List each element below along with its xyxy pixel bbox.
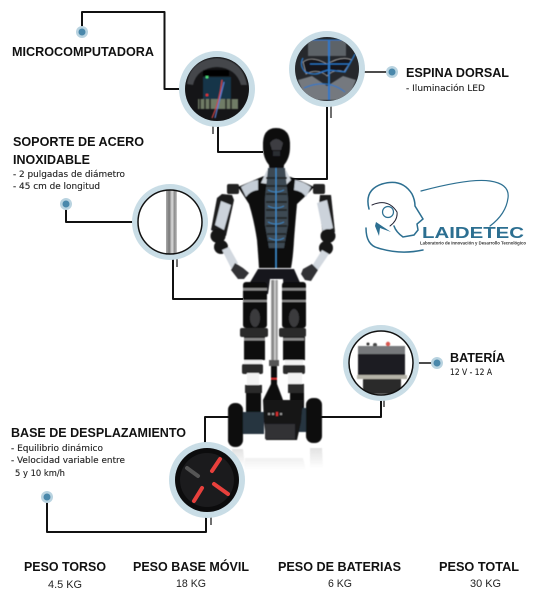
stat: peso total: 30 KG <box>470 578 501 590</box>
text block: soporte de acero: INOXIDABLE <box>13 152 90 167</box>
stat: peso torso: 4.5 KG <box>48 579 82 591</box>
logo mark <box>366 180 508 252</box>
text block: soporte de acero <box>13 134 144 192</box>
dot: soporte <box>60 198 72 210</box>
mobile base <box>228 398 322 447</box>
text block: soporte de acero: SOPORTE DE ACERO <box>13 134 144 149</box>
circle: spine photo <box>289 31 365 107</box>
circle: wheel photo <box>169 442 245 518</box>
stat: peso base movil: 18 KG <box>176 578 206 590</box>
left leg <box>240 282 268 420</box>
left arm <box>210 184 249 279</box>
stat: peso de baterias: PESO DE BATERIAS <box>278 559 401 574</box>
stat: peso base movil: PESO BASE MÓVIL <box>133 559 249 574</box>
stat: peso de baterias <box>278 559 401 590</box>
logo name: LAIDETEC <box>422 225 525 242</box>
head <box>263 128 290 178</box>
right arm <box>301 184 336 281</box>
robot <box>210 128 336 470</box>
stat: peso total: PESO TOTAL <box>439 559 519 574</box>
text block: base de desplazamiento: - Equilibrio dinámico <box>11 444 103 454</box>
circle: microcomputer photo <box>179 51 255 127</box>
heading: espina dorsal: ESPINA DORSAL <box>406 65 509 80</box>
pelvis <box>243 269 305 294</box>
text block: base de desplazamiento <box>11 425 186 479</box>
text: bateria details: 12 V - 12 A <box>450 368 492 378</box>
connector lines <box>47 12 437 532</box>
logo: LAIDETEC <box>366 180 526 252</box>
text: espina dorsal details: - Iluminación LED <box>406 83 485 94</box>
reflection <box>232 448 323 470</box>
text block: soporte de acero: - 45 cm de longitud <box>13 182 100 192</box>
circle: battery photo <box>343 325 419 401</box>
support pole <box>263 280 283 400</box>
dot: microcomputadora <box>76 26 88 38</box>
heading: bateria: BATERÍA <box>450 350 506 365</box>
dot: espina dorsal <box>386 66 398 78</box>
stat: peso total <box>439 559 519 590</box>
logo subtitle: Laboratorio de Innovación y Desarrollo Tecnológico <box>420 240 526 246</box>
circle: steel bar photo <box>132 184 208 260</box>
stat: peso torso: PESO TORSO <box>24 559 106 574</box>
stat: peso torso <box>24 559 106 591</box>
stat: peso de baterias: 6 KG <box>328 578 352 590</box>
dot: base <box>41 491 53 503</box>
heading: microcomputadora: MICROCOMPUTADORA <box>12 44 155 59</box>
dot: bateria <box>431 357 443 369</box>
text block: base de desplazamiento: 5 y 10 km/h <box>15 469 65 479</box>
text block: soporte de acero: - 2 pulgadas de diámetro <box>13 170 125 180</box>
text block: base de desplazamiento: BASE DE DESPLAZAMIENTO <box>11 425 186 440</box>
torso <box>238 168 314 268</box>
stat: peso base movil <box>133 559 249 590</box>
right leg <box>279 282 306 420</box>
text block: base de desplazamiento: - Velocidad variable entre <box>11 456 125 466</box>
